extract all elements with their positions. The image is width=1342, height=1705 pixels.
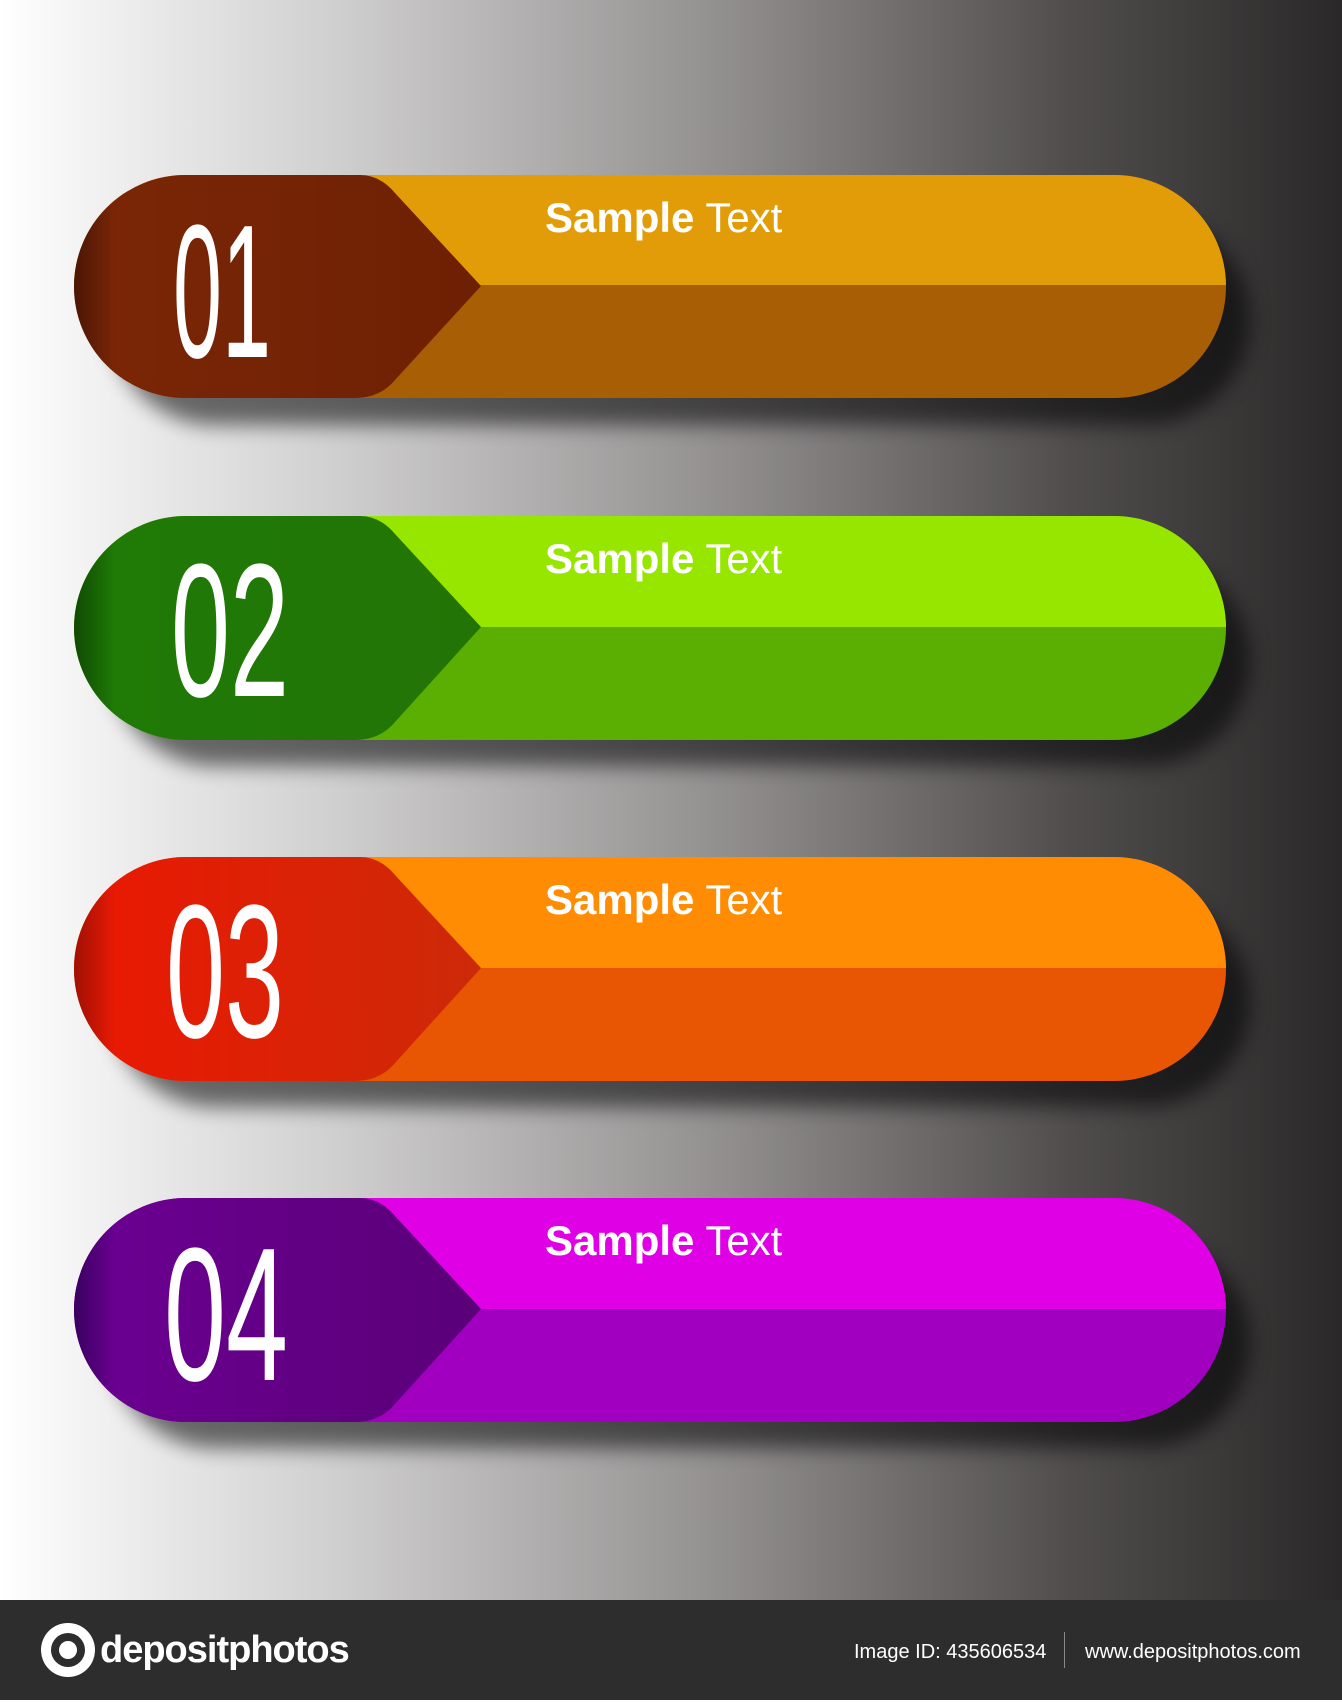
heading text: Sample Text bbox=[545, 1217, 783, 1264]
panel: item 02 bbox=[74, 516, 1250, 766]
website: www.depositphotos.com bbox=[1084, 1641, 1301, 1663]
number 03: 03 bbox=[166, 866, 284, 1078]
heading text: Sample Text bbox=[545, 535, 783, 582]
heading text: Sample Text bbox=[545, 876, 783, 923]
brand name: depositphotos bbox=[100, 1629, 349, 1671]
image id: Image ID: 435606534 bbox=[854, 1641, 1046, 1663]
number 02: 02 bbox=[171, 525, 289, 737]
number 04: 04 bbox=[164, 1209, 288, 1421]
panel: item 03 bbox=[74, 857, 1250, 1107]
panel: item 04 bbox=[74, 1198, 1250, 1448]
panel: item 01: 01 bbox=[173, 186, 271, 398]
footer bar bbox=[0, 1600, 1342, 1700]
icon: logo bbox=[41, 1623, 95, 1677]
panel: item 01 bbox=[74, 175, 1250, 425]
heading text: Sample Text bbox=[545, 194, 783, 241]
